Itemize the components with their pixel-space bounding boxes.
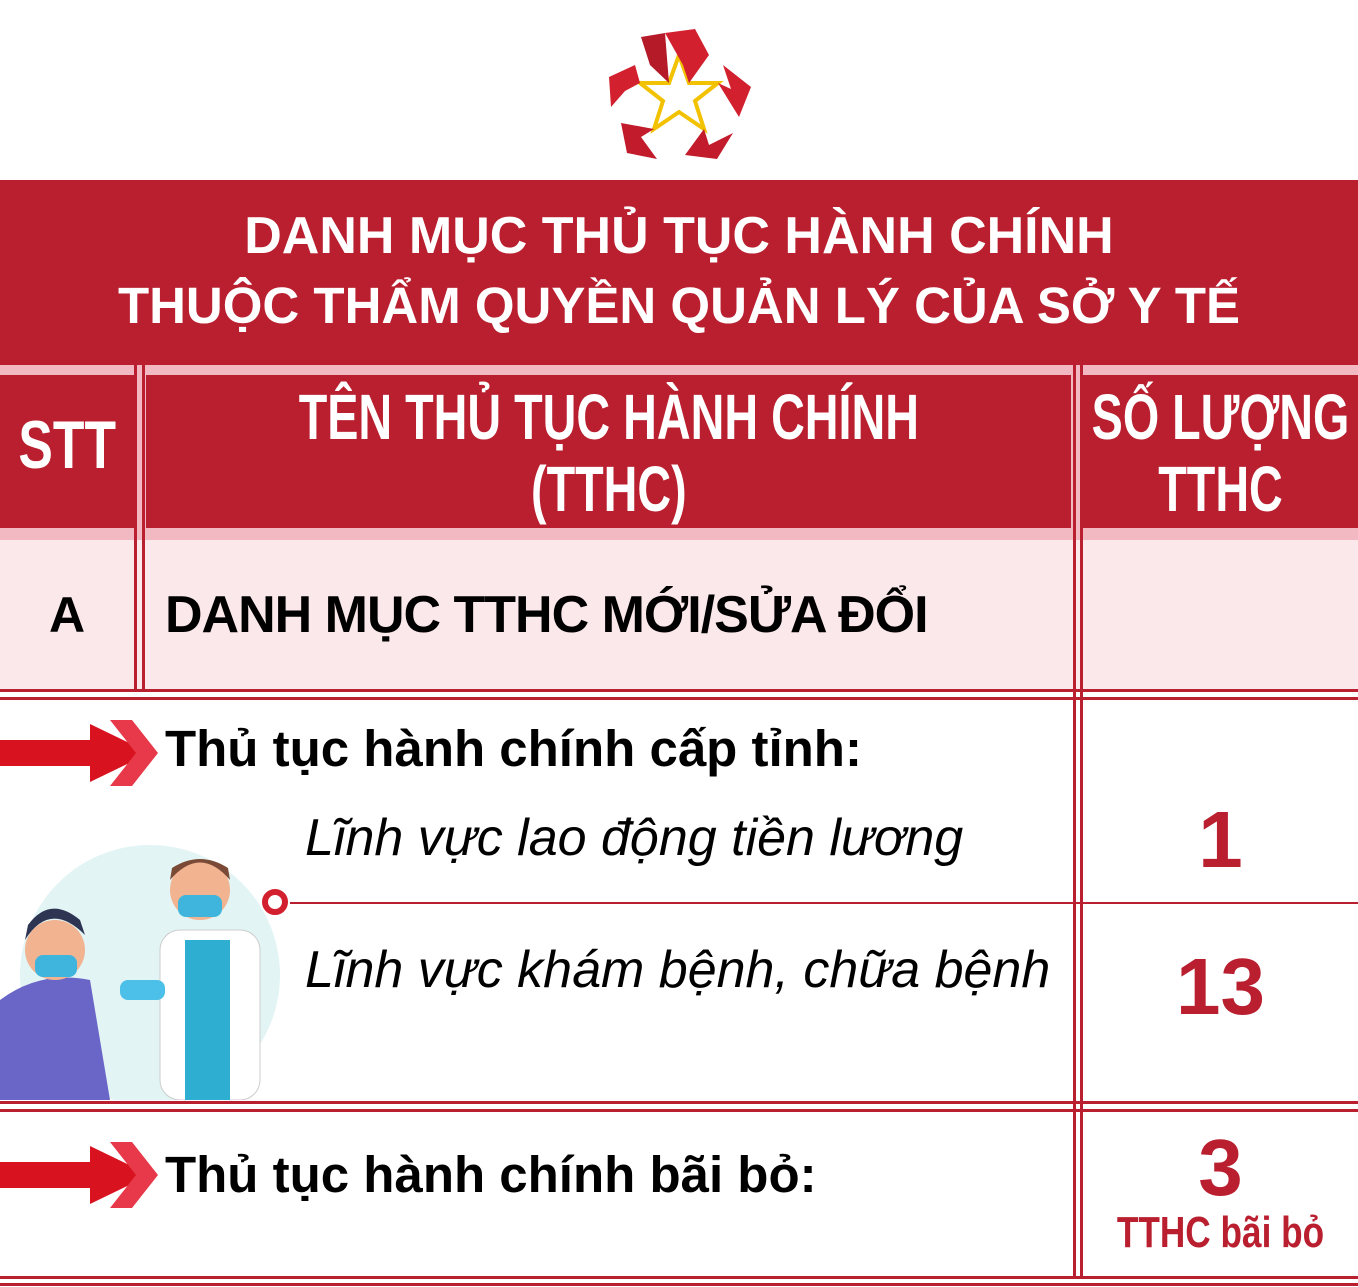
- illustration: vaccination: [0, 845, 288, 1100]
- arrow 1: [0, 720, 158, 786]
- pink strips: [0, 365, 1358, 540]
- title banner: THUỘC THẨM QUYỀN QUẢN LÝ CỦA SỞ Y TẾ: [118, 277, 1240, 334]
- heading: cấp tỉnh: Thủ tục hành chính cấp tỉnh:: [165, 720, 862, 777]
- number 3 with label: TTHC bãi bỏ: [1117, 1208, 1324, 1257]
- title banner: DANH MỤC THỦ TỤC HÀNH CHÍNH: [244, 207, 1114, 265]
- horizontal lines: [0, 689, 1358, 692]
- header: TÊN THỦ TỤC: TÊN THỦ TỤC HÀNH CHÍNH: [298, 381, 919, 453]
- header: STT: [0, 375, 134, 528]
- header text: SỐ LƯỢNG: [1092, 381, 1350, 525]
- item 2: Lĩnh vực khám bệnh, chữa bệnh: [305, 941, 1050, 999]
- number 13: 13: [1176, 942, 1265, 1031]
- header: TÊN THỦ TỤC: (TTHC): [531, 453, 686, 525]
- number 3 with label: [1117, 1123, 1324, 1257]
- logo: star of hands: [609, 29, 751, 159]
- heading: bãi bỏ: Thủ tục hành chính bãi bỏ:: [165, 1146, 817, 1203]
- title banner: [0, 180, 1358, 365]
- A label: A: [49, 587, 85, 643]
- vertical lines: [134, 365, 137, 690]
- header: SỐ LƯỢNG: [1083, 375, 1358, 528]
- number 3 with label: 3: [1198, 1123, 1243, 1212]
- header text: SỐ LƯỢNG: TTHC: [1159, 453, 1283, 525]
- A title: DANH MỤC TTHC MỚI/SỬA ĐỔI: [165, 586, 928, 644]
- number 1: 1: [1198, 795, 1243, 884]
- row A: [0, 540, 1358, 690]
- item 1: Lĩnh vực lao động tiền lương: [305, 809, 963, 867]
- header: STT: STT: [18, 407, 116, 483]
- header row: [0, 375, 1358, 528]
- arrow 2: [0, 1142, 158, 1208]
- header: TÊN THỦ TỤC: [146, 375, 1071, 528]
- header text: SỐ LƯỢNG: SỐ LƯỢNG: [1092, 381, 1350, 453]
